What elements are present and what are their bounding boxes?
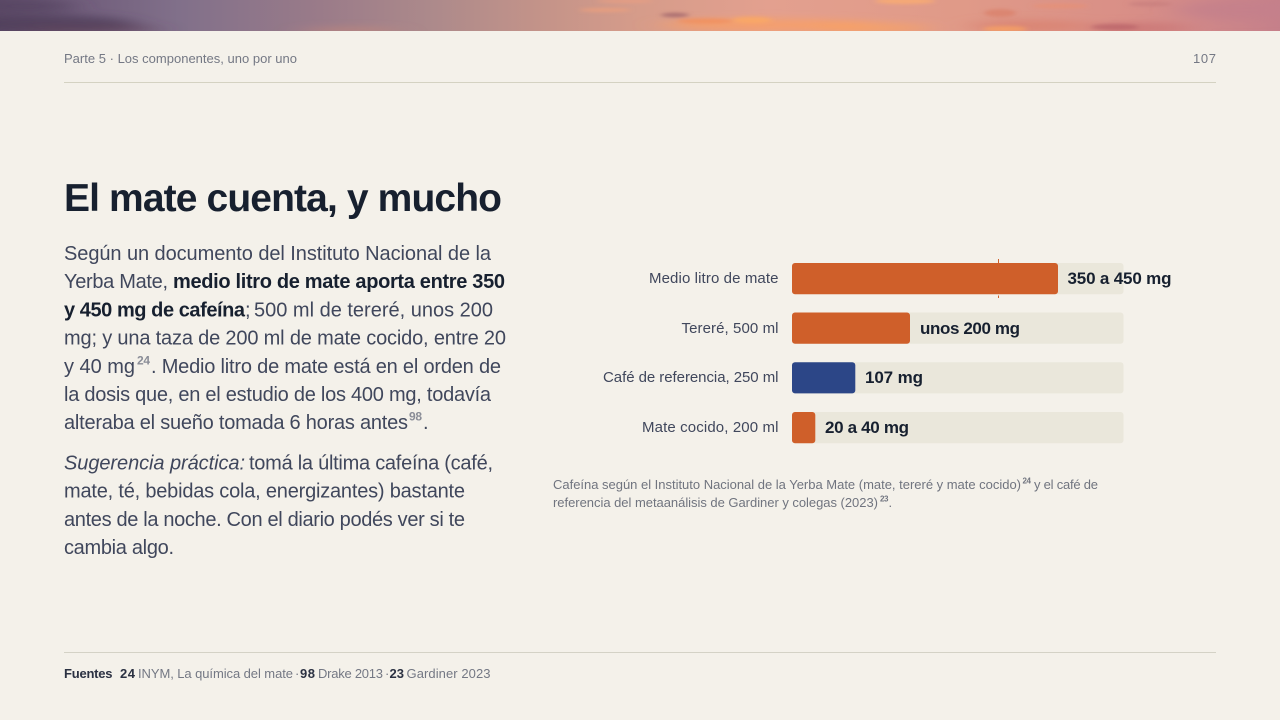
chart caption: 24 [1022, 476, 1032, 486]
banner: sunset sky [0, 0, 1280, 34]
text block: caffeine amounts: . Medio litro de mate está en el orden de [151, 356, 501, 378]
text block: caffeine amounts: medio litro de mate aporta entre 350 [173, 271, 505, 293]
chart caption: 23 [880, 494, 889, 504]
sources footer: · [385, 666, 389, 681]
sources footer: 24 [120, 666, 136, 681]
chart caption [553, 476, 1098, 510]
sources footer: · [295, 666, 299, 681]
row: medio litro de mate: 350 a 450 mg [1068, 269, 1172, 288]
sources footer: 23 [390, 666, 404, 681]
sources footer: Drake 2013 [318, 666, 383, 681]
row: café de referencia [603, 362, 1124, 393]
title: El mate cuenta, y mucho [64, 177, 502, 220]
row: tereré: unos 200 mg [920, 319, 1020, 338]
row: medio litro de mate: Medio litro de mate [649, 270, 778, 287]
chart caption: Cafeína según el Instituto Nacional de la Yerba Mate (mate, tereré y mate cocido) [553, 477, 1021, 492]
page header: Parte 5 · Los componentes, uno por uno [64, 51, 297, 66]
page header: 107 [1193, 51, 1216, 66]
row: café de referencia: Café de referencia, 250 ml [603, 369, 778, 386]
text block: caffeine amounts: alteraba el sueño tomada 6 horas antes [64, 412, 408, 434]
chart caption: y el café de [1034, 477, 1098, 492]
row: tereré [682, 312, 1124, 344]
text block: caffeine amounts: 98 [409, 410, 422, 424]
text block: practical suggestion: Sugerencia práctica: [64, 452, 245, 474]
text block: caffeine amounts: Yerba Mate, [64, 271, 168, 293]
text block: caffeine amounts: y 40 mg [64, 356, 135, 378]
text block: caffeine amounts: ; [245, 299, 251, 321]
text block: caffeine amounts: 500 ml de tereré, unos 200 [254, 299, 493, 321]
sources footer: Fuentes [64, 666, 112, 681]
text block: caffeine amounts: la dosis que, en el estudio de los 400 mg, todavía [64, 384, 492, 406]
text block: practical suggestion: tomá la última cafeína (café, [249, 452, 493, 474]
text block: practical suggestion: antes de la noche. Con el diario podés ver si te [64, 509, 465, 531]
text block: caffeine amounts: Según un documento del Instituto Nacional de la [64, 243, 492, 265]
row: café de referencia: 107 mg [865, 368, 923, 387]
chart caption: referencia del metaanálisis de Gardiner y colegas (2023) [553, 495, 878, 510]
row: tereré: Tereré, 500 ml [682, 320, 778, 337]
text block: caffeine amounts: 24 [137, 354, 150, 368]
text block: caffeine amounts: . [423, 412, 429, 434]
row: mate cocido [642, 412, 1124, 443]
sources footer: 98 [300, 666, 315, 681]
chart caption: . [888, 495, 892, 510]
page header [64, 51, 1216, 83]
row: mate cocido: 20 a 40 mg [825, 418, 909, 437]
row: mate cocido: Mate cocido, 200 ml [642, 419, 778, 436]
sources footer: INYM, La química del mate [138, 666, 293, 681]
text block: practical suggestion: mate, té, bebidas cola, energizantes) bastante [64, 481, 465, 503]
bar chart: caffeine per serving [603, 259, 1172, 443]
sources footer [64, 652, 1216, 681]
sources footer: Gardiner 2023 [406, 666, 490, 681]
text block: caffeine amounts: mg; y una taza de 200 ml de mate cocido, entre 20 [64, 328, 506, 350]
text block: practical suggestion: cambia algo. [64, 537, 174, 559]
text block: caffeine amounts [64, 243, 506, 434]
row: medio litro de mate [649, 259, 1172, 298]
text block: practical suggestion [64, 452, 493, 559]
text block: caffeine amounts: y 450 mg de cafeína [64, 299, 246, 321]
